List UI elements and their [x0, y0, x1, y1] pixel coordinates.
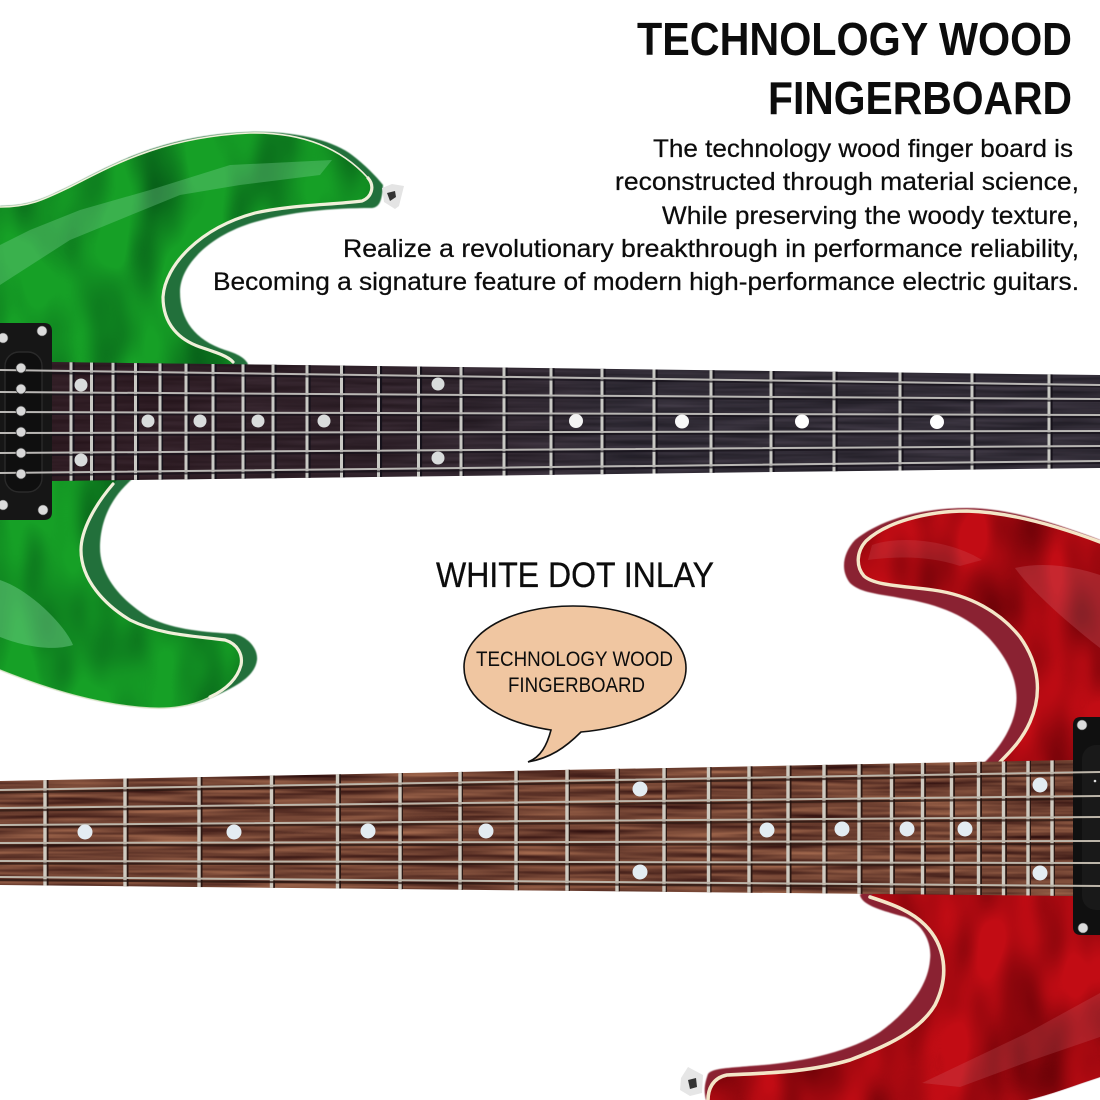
description text: reconstructed through material science, — [615, 168, 1079, 196]
green quilted top — [0, 134, 370, 708]
green pickup — [0, 323, 52, 520]
description text: While preserving the woody texture, — [662, 202, 1079, 230]
green strings — [0, 370, 1100, 475]
white dot inlay heading: WHITE DOT INLAY — [436, 556, 714, 595]
red pickup — [1073, 717, 1100, 935]
red fingerboard — [0, 755, 1080, 900]
green pickup poles — [16, 363, 26, 479]
red guitar body side — [705, 508, 1100, 1100]
green fingerboard — [52, 362, 1100, 481]
red string shadows — [0, 775, 1073, 888]
green strap button — [382, 184, 404, 209]
red strings — [0, 772, 1100, 886]
title — [637, 13, 1072, 124]
green guitar body side — [0, 132, 383, 708]
red frets — [48, 755, 1054, 900]
red quilted top — [690, 500, 1100, 1100]
speech bubble callout: FINGERBOARD — [508, 674, 645, 697]
green guitar — [0, 0, 1100, 720]
description text — [213, 135, 1079, 296]
description text: The technology wood finger board is — [653, 135, 1073, 163]
speech bubble callout — [464, 606, 686, 762]
red inlay dots — [78, 778, 1048, 880]
red cream binding — [708, 511, 1100, 1100]
description text: Becoming a signature feature of modern high-performance electric guitars. — [213, 268, 1079, 296]
green inlay dots — [74, 378, 944, 466]
description text: Realize a revolutionary breakthrough in performance reliability, — [343, 235, 1079, 263]
red guitar — [0, 500, 1100, 1100]
speech bubble callout: TECHNOLOGY WOOD — [476, 648, 673, 671]
green cream binding — [0, 133, 372, 708]
green frets — [72, 362, 1052, 481]
red strap button — [680, 1067, 703, 1096]
